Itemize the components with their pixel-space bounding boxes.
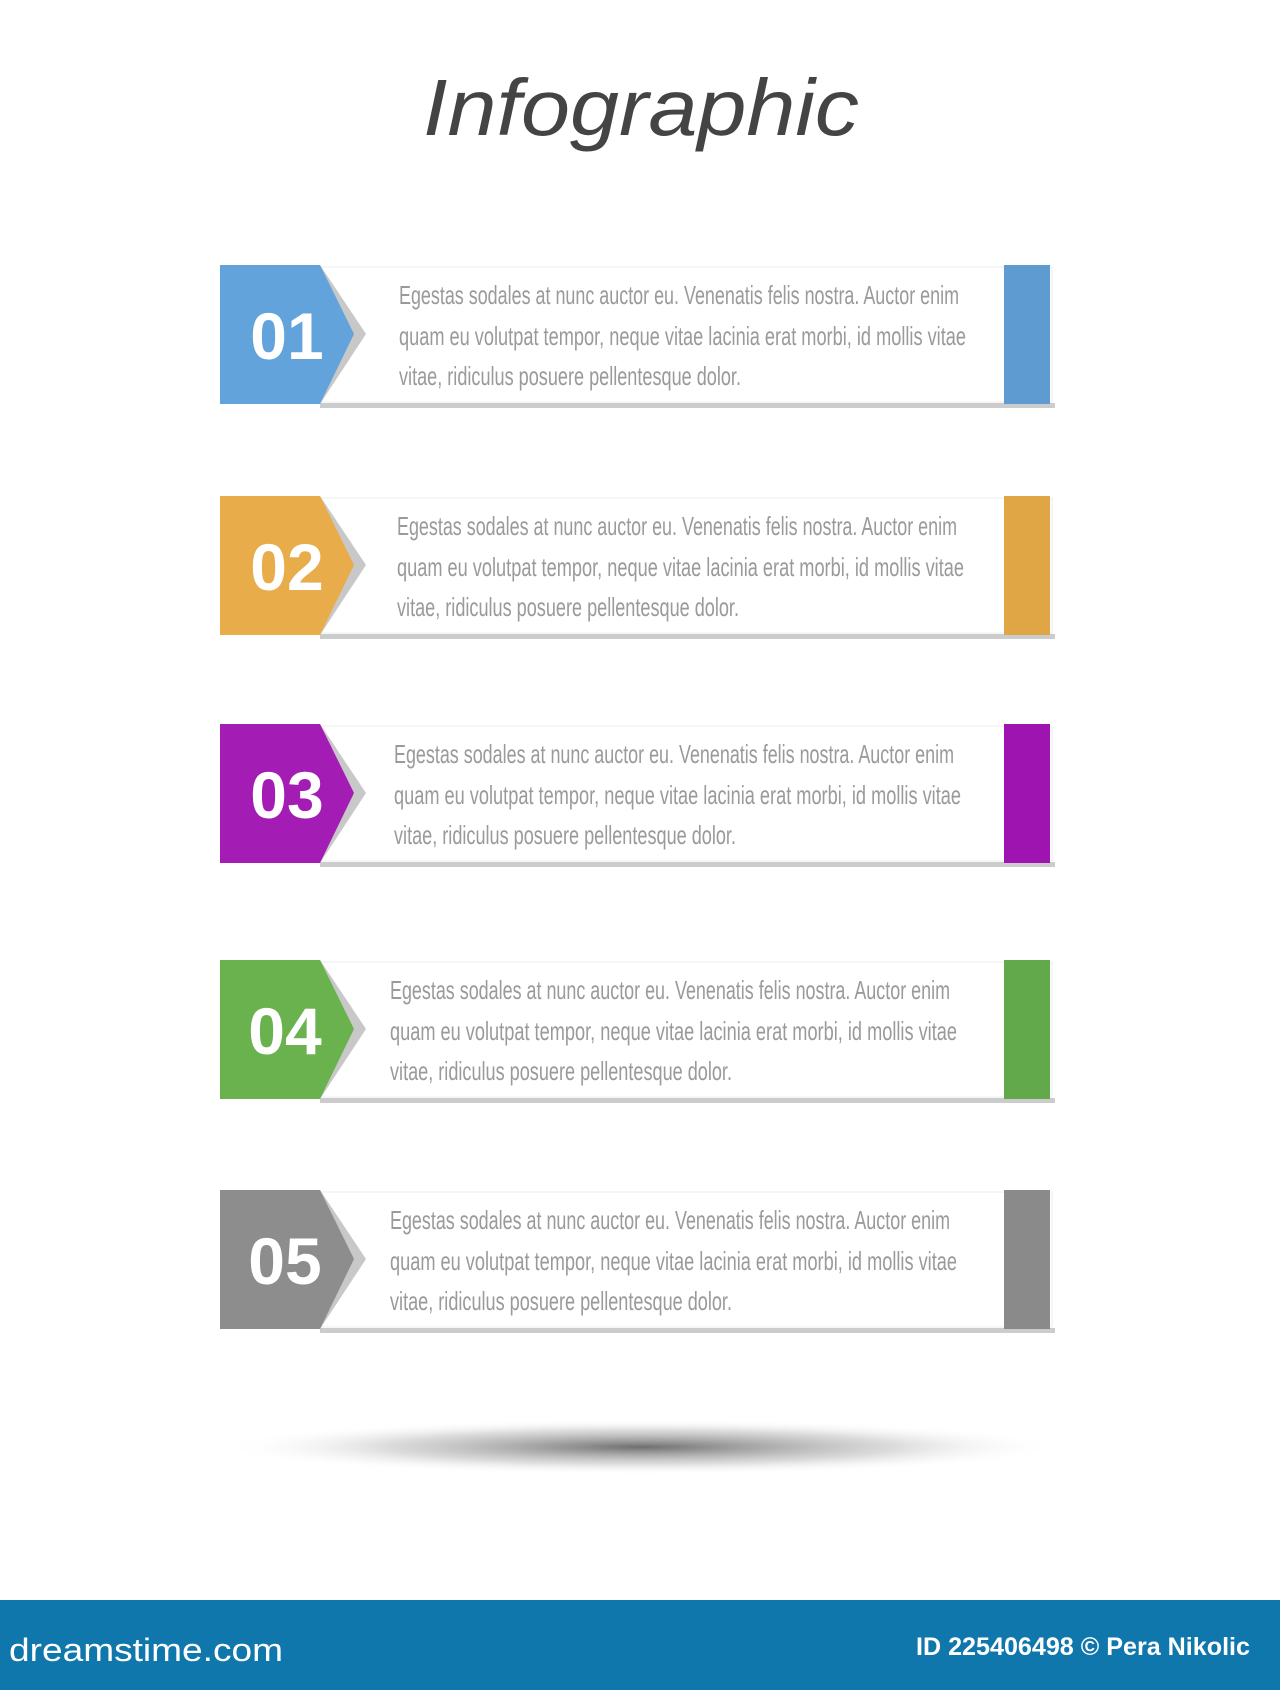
row 03 (220, 724, 1055, 867)
row 04: 04 (248, 994, 322, 1068)
row 01: vitae, ridiculus posuere pellentesque dolor. (399, 361, 741, 391)
row 04 (220, 960, 1055, 1103)
row 04: Egestas sodales at nunc auctor eu. Venenatis felis nostra. Auctor enim (390, 975, 950, 1005)
row 05: quam eu volutpat tempor, neque vitae lacinia erat morbi, id mollis vitae (390, 1246, 957, 1276)
title: Infographic (423, 63, 859, 152)
row 02: vitae, ridiculus posuere pellentesque dolor. (397, 592, 739, 622)
footer bar: dreamstime.com (9, 1632, 283, 1668)
floor shadow (221, 1419, 1061, 1475)
row 03: 03 (250, 758, 324, 832)
row 03: quam eu volutpat tempor, neque vitae lacinia erat morbi, id mollis vitae (394, 780, 961, 810)
row 03: Egestas sodales at nunc auctor eu. Venenatis felis nostra. Auctor enim (394, 739, 954, 769)
row 02 (220, 496, 1055, 639)
row 04: vitae, ridiculus posuere pellentesque dolor. (390, 1056, 732, 1086)
footer bar: ID 225406498 © Pera Nikolic (916, 1633, 1250, 1661)
row 02: Egestas sodales at nunc auctor eu. Venenatis felis nostra. Auctor enim (397, 511, 957, 541)
row 01: quam eu volutpat tempor, neque vitae lacinia erat morbi, id mollis vitae (399, 321, 966, 351)
row 02: 02 (250, 530, 324, 604)
row 02: quam eu volutpat tempor, neque vitae lacinia erat morbi, id mollis vitae (397, 552, 964, 582)
row 05: 05 (248, 1224, 322, 1298)
row 05: Egestas sodales at nunc auctor eu. Venenatis felis nostra. Auctor enim (390, 1205, 950, 1235)
row 01 (220, 265, 1055, 408)
row 03: vitae, ridiculus posuere pellentesque dolor. (394, 820, 736, 850)
footer bar (0, 1600, 1280, 1690)
row 04: quam eu volutpat tempor, neque vitae lacinia erat morbi, id mollis vitae (390, 1016, 957, 1046)
row 05: vitae, ridiculus posuere pellentesque dolor. (390, 1286, 732, 1316)
row 05 (220, 1190, 1055, 1333)
row 01: Egestas sodales at nunc auctor eu. Venenatis felis nostra. Auctor enim (399, 280, 959, 310)
row 01: 01 (250, 299, 324, 373)
